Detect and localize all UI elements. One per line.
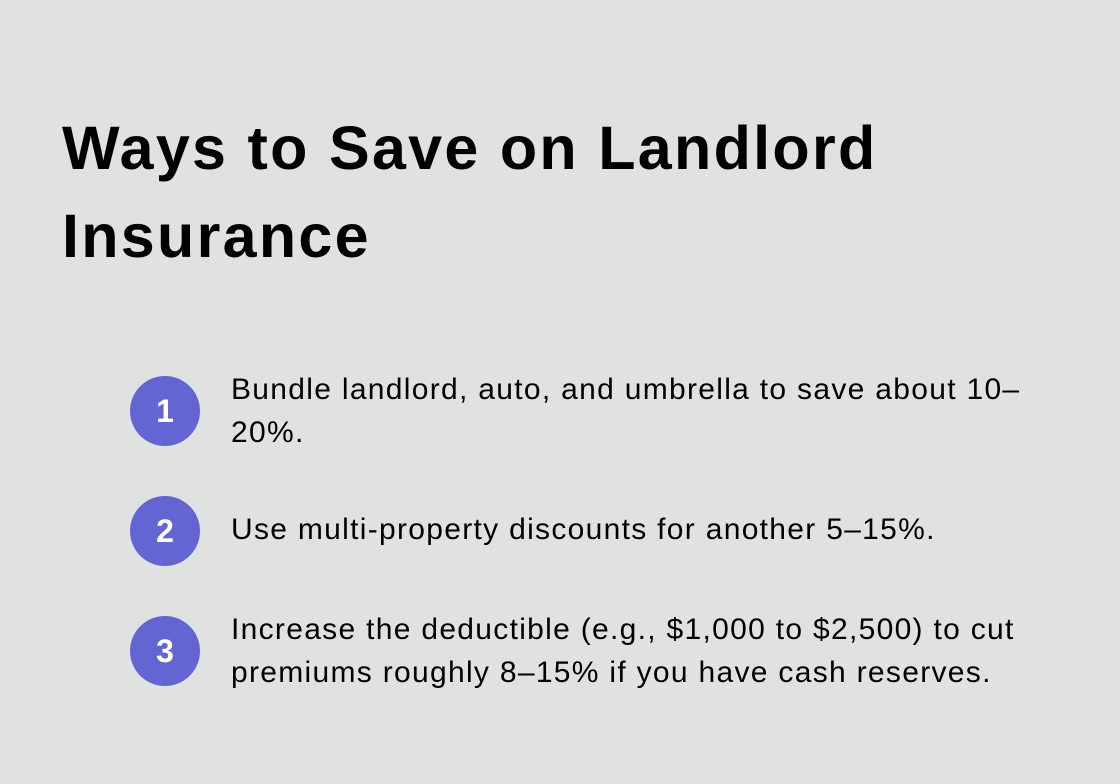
icon: number 1: 1 [156,393,174,429]
icon: number 3 [130,616,200,686]
item 3 [130,613,1015,689]
title [62,114,878,270]
item 1 [130,373,1020,449]
title: Insurance [62,202,371,270]
icon: number 1 [130,376,200,446]
text 3: premiums roughly 8–15% if you have cash reserves. [231,656,992,689]
text 3 [231,613,1015,689]
icon: number 3: 3 [156,633,174,669]
item 2 [130,496,936,566]
icon: number 2 [130,496,200,566]
text 1: Bundle landlord, auto, and umbrella to save about 10– [231,373,1020,406]
text 3: Increase the deductible (e.g., $1,000 to $2,500) to cut [231,613,1015,646]
icon: number 2: 2 [156,513,174,549]
text 1: 20%. [231,416,305,449]
text 1 [231,373,1020,449]
text 2: Use multi-property discounts for another 5–15%. [231,513,936,546]
title: Ways to Save on Landlord [62,114,878,182]
